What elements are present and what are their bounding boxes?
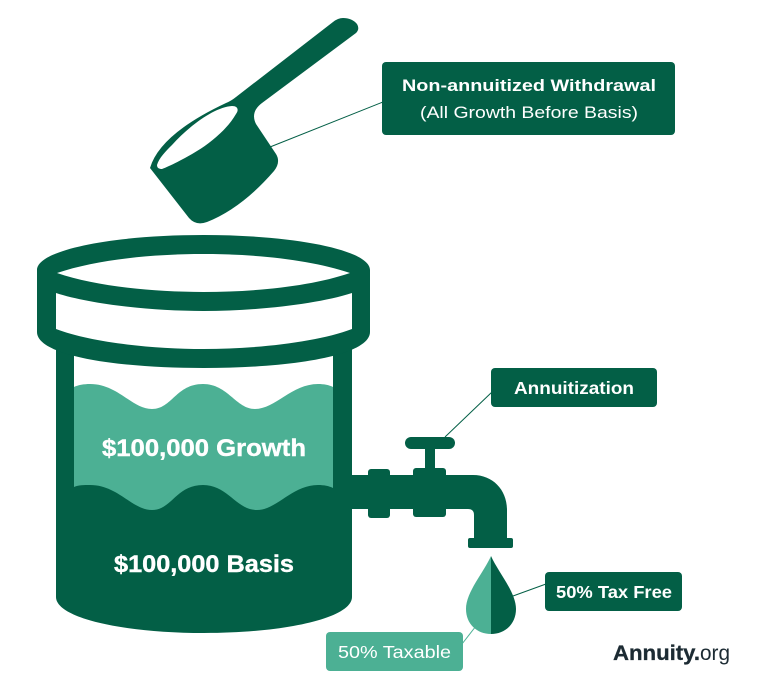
callout: non-annuitized withdrawal [382, 62, 675, 135]
growth layer [74, 384, 333, 520]
connector: faucet handle to annuitization label [445, 392, 492, 437]
label: growth: $100,000 Growth [102, 435, 306, 462]
callout: non-annuitized withdrawal: Non-annuitized Withdrawal [402, 76, 656, 95]
basis layer [56, 345, 352, 633]
callout: annuitization [491, 368, 657, 407]
icon: faucet [345, 437, 513, 548]
callout: 50% tax free: 50% Tax Free [556, 582, 672, 602]
bucket rim [37, 235, 370, 368]
logo: Annuity.org: org [700, 642, 730, 665]
connector: drop to tax free label [513, 584, 546, 596]
label: basis: $100,000 Basis [114, 551, 294, 578]
connector: scoop to withdrawal label [270, 102, 383, 147]
callout: 50% taxable: 50% Taxable [338, 642, 451, 662]
logo: Annuity.org: Annuity. [613, 642, 700, 665]
callout: 50% taxable [326, 632, 463, 671]
callout: 50% tax free [545, 572, 682, 611]
icon: scoop [150, 18, 358, 223]
bucket [37, 235, 370, 633]
callout: non-annuitized withdrawal: (All Growth Before Basis) [420, 103, 638, 122]
callout: annuitization: Annuitization [514, 378, 634, 398]
connector: drop to taxable label [462, 626, 476, 644]
icon: water drop [466, 556, 516, 634]
